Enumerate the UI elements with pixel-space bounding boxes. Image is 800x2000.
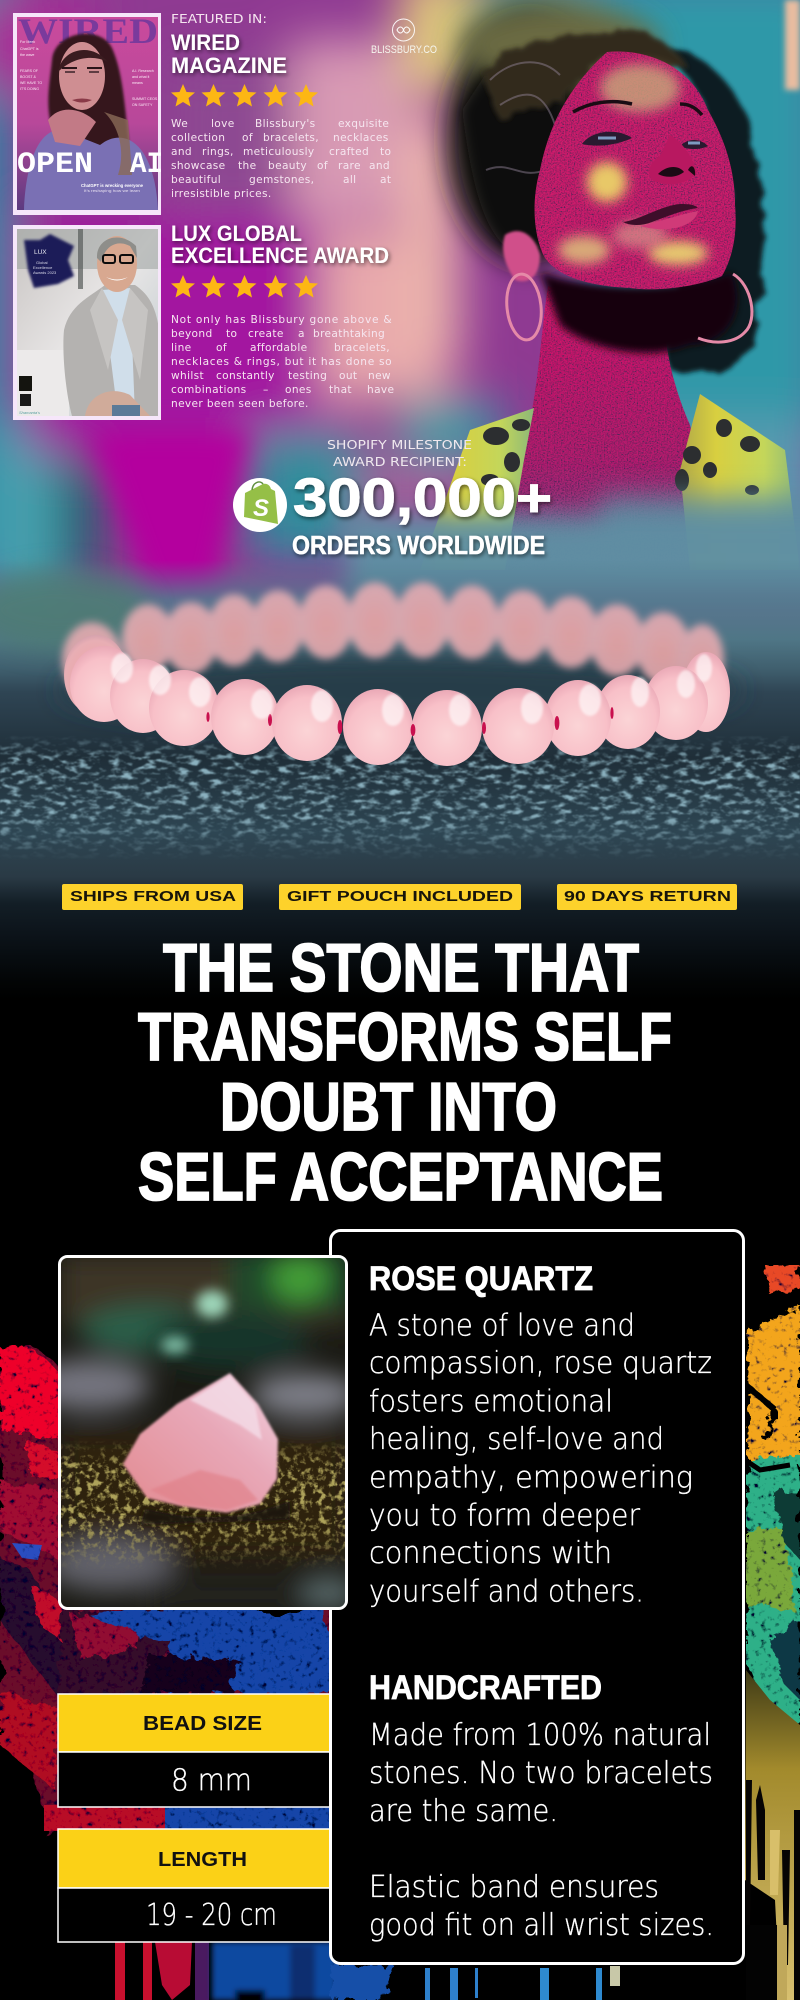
paint splash: right orange, green, yellow xyxy=(745,1265,800,2000)
text: handcrafted body: Elastic band ensures xyxy=(369,1870,659,1905)
magazine cover: Wired: ChatGPT is xyxy=(20,47,39,51)
review paragraph: meticulously xyxy=(243,146,315,158)
text: handcrafted body: stones. No two bracelets xyxy=(369,1756,713,1791)
milestone caption xyxy=(327,437,472,469)
ear xyxy=(503,231,540,281)
magazine cover: Wired: ON SAFETY xyxy=(132,103,153,107)
review paragraph: and xyxy=(369,160,390,172)
hair xyxy=(446,5,764,373)
text: featured in Wired: MAGAZINE xyxy=(171,53,287,78)
highlights xyxy=(111,653,712,726)
cord xyxy=(206,707,614,736)
face xyxy=(535,51,736,289)
text: featured in Wired: WIRED xyxy=(171,30,240,55)
badge: 90 days return xyxy=(557,884,737,910)
award paragraph: line xyxy=(171,342,192,354)
review paragraph: gemstones, xyxy=(249,174,314,186)
text: handcrafted body xyxy=(369,1718,714,1943)
award paragraph: constantly xyxy=(216,370,275,382)
award paragraph: whilst xyxy=(171,370,204,382)
lower fade over portrait xyxy=(345,495,800,605)
spec table: bead size: BEAD SIZE xyxy=(143,1712,262,1735)
portrait: woman looking up xyxy=(420,5,800,570)
award paragraph: ones xyxy=(285,384,312,396)
award paragraph: have xyxy=(367,384,394,396)
magazine cover: Lux award: Excellence xyxy=(33,265,53,270)
magazine cover: Wired xyxy=(13,11,163,215)
review paragraph xyxy=(171,118,391,200)
product photo: rose quartz bracelet xyxy=(62,582,730,766)
magenta cone xyxy=(88,430,250,600)
magazine cover: Lux award: LUX xyxy=(34,249,47,256)
review paragraph: and xyxy=(171,146,192,158)
review paragraph: to xyxy=(380,146,391,158)
brand logo: Blissbury.co: BLISSBURY.CO xyxy=(371,44,437,56)
review paragraph: crafted xyxy=(329,146,369,158)
review paragraph: collection xyxy=(171,132,225,144)
award paragraph: Not only has Blissbury gone above & xyxy=(171,314,392,326)
award paragraph: create xyxy=(248,328,284,340)
magazine cover: Wired: SUMMIT CEOS xyxy=(132,97,158,101)
spec table: length xyxy=(58,1829,333,1942)
magazine cover: Wired: and what it xyxy=(132,75,149,79)
text: handcrafted body: Made from 100% natural xyxy=(369,1718,711,1753)
text: featured in Wired xyxy=(171,11,391,200)
review paragraph: of xyxy=(242,132,253,144)
icon: Shopify bag xyxy=(233,478,287,532)
award paragraph: that xyxy=(329,384,352,396)
badge: gift pouch included xyxy=(279,884,521,910)
magazine cover: Wired: the wave xyxy=(20,53,34,57)
back row of beads xyxy=(62,582,724,698)
neck xyxy=(505,286,720,570)
hero background: blurred colour field xyxy=(0,0,800,640)
award paragraph: combinations xyxy=(171,384,247,396)
award paragraph: to xyxy=(226,328,237,340)
rating stars xyxy=(171,84,318,106)
badge: ships from USA xyxy=(62,884,243,910)
text: Lux Global award: LUX GLOBAL xyxy=(171,221,302,246)
badge: 90 days return: 90 DAYS RETURN xyxy=(564,889,731,905)
review paragraph: beautiful xyxy=(171,174,221,186)
paint splash: left red and blue xyxy=(0,1345,340,1945)
review paragraph: exquisite xyxy=(338,118,389,130)
main title: SELF ACCEPTANCE xyxy=(138,1139,663,1215)
award paragraph xyxy=(171,314,394,410)
rating stars xyxy=(171,275,318,298)
award paragraph: affordable xyxy=(250,342,308,354)
review paragraph: bracelets, xyxy=(263,132,319,144)
award paragraph: breathtaking xyxy=(313,328,385,340)
text: Lux Global award: EXCELLENCE AWARD xyxy=(171,243,389,268)
main title: DOUBT INTO xyxy=(220,1069,557,1145)
magazine cover: Wired: For Meek xyxy=(20,40,35,44)
award paragraph: new xyxy=(368,370,391,382)
heading: rose quartz: ROSE QUARTZ xyxy=(369,1260,593,1298)
masthead: WIRED xyxy=(18,11,158,51)
spec table: length: 19 - 20 cm xyxy=(146,1898,277,1933)
shirt xyxy=(420,394,800,570)
text: rose quartz body: empathy, empowering xyxy=(369,1460,693,1496)
text: handcrafted body: are the same. xyxy=(369,1794,558,1829)
panel: rose quartz description xyxy=(330,1230,744,1964)
magazine cover: Wired: IT'S DOING xyxy=(20,87,39,91)
review paragraph: beauty xyxy=(268,160,307,172)
text: handcrafted body: good fit on all wrist sizes. xyxy=(369,1908,714,1943)
magazine cover: Lux award: Shamanta's xyxy=(19,410,40,415)
earrings xyxy=(504,272,752,342)
review paragraph: all xyxy=(343,174,356,186)
text: rose quartz body: healing, self-love and xyxy=(369,1422,664,1457)
man in suit xyxy=(63,285,160,416)
main title: TRANSFORMS SELF xyxy=(138,999,672,1075)
feature badges xyxy=(62,884,737,910)
magazine cover: Wired: OPEN xyxy=(17,148,93,182)
magazine cover: Lux award: Global xyxy=(36,260,48,265)
text: rose quartz body: connections with xyxy=(369,1536,612,1571)
under-chin shadow xyxy=(540,272,738,353)
brand logo: Blissbury.co xyxy=(371,19,437,56)
review paragraph: of xyxy=(317,160,328,172)
text: rose quartz body: compassion, rose quartz xyxy=(369,1346,712,1381)
review paragraph: necklaces xyxy=(333,132,389,144)
award paragraph: never been seen before. xyxy=(171,398,309,410)
magazine cover: Wired: ChatGPT is wrecking everyone xyxy=(81,183,144,188)
paint splash: bottom drips xyxy=(115,1942,620,2000)
magazine cover: Lux award: Awards 2023 xyxy=(33,270,57,275)
mouth xyxy=(623,204,698,225)
award paragraph: testing xyxy=(288,370,327,382)
text: Lux Global award xyxy=(171,221,394,410)
review paragraph: the xyxy=(238,160,256,172)
magazine cover: Wired: means xyxy=(132,81,143,85)
main title xyxy=(138,930,672,1215)
front row of beads xyxy=(64,635,730,766)
nose xyxy=(649,135,697,184)
milestone caption: AWARD RECIPIENT: xyxy=(333,454,467,469)
heading: handcrafted: HANDCRAFTED xyxy=(369,1669,602,1707)
award paragraph: beyond xyxy=(171,328,213,340)
Shopify milestone block xyxy=(233,437,552,560)
spec table: length: LENGTH xyxy=(158,1848,247,1871)
icon: Shopify bag: S xyxy=(253,495,269,522)
review paragraph: rings, xyxy=(202,146,234,158)
review paragraph: irresistible prices. xyxy=(171,188,272,200)
award paragraph: bracelets, xyxy=(334,342,390,354)
text: rose quartz body: fosters emotional xyxy=(369,1384,613,1420)
orders count: 300,000+ xyxy=(293,468,552,528)
award paragraph: – xyxy=(263,384,269,396)
spec table: bead size xyxy=(58,1694,333,1807)
text: rose quartz body xyxy=(369,1308,712,1610)
award paragraph: necklaces & rings, but it has done so xyxy=(171,356,392,368)
magazine cover: Wired: A.I. Research xyxy=(132,69,154,73)
review paragraph: We xyxy=(171,118,188,130)
magazine cover: Lux award xyxy=(13,225,161,420)
award paragraph: out xyxy=(339,370,357,382)
eyes and brows xyxy=(573,102,702,115)
text: rose quartz body: you to form deeper xyxy=(369,1498,641,1534)
award paragraph: a xyxy=(298,328,305,340)
magazine cover: Wired: FEARS OF xyxy=(20,69,39,73)
orders caption: ORDERS WORLDWIDE xyxy=(292,530,545,560)
badge: gift pouch included: GIFT POUCH INCLUDED xyxy=(287,889,513,905)
magazine cover: Wired: It's reshaping how we learn xyxy=(84,189,140,193)
text: rose quartz body: yourself and others. xyxy=(369,1574,644,1610)
magazine cover: Wired: WE HAVE TO xyxy=(20,81,42,85)
review paragraph: love xyxy=(211,118,235,130)
blurred surface and stone background xyxy=(0,560,800,1000)
magazine cover: Wired: BOOST & xyxy=(20,75,37,79)
text: featured in Wired: FEATURED IN: xyxy=(171,11,267,26)
review paragraph: at xyxy=(380,174,391,186)
text: rose quartz body: A stone of love and xyxy=(369,1308,635,1344)
magazine cover: Wired: AI xyxy=(130,148,163,182)
review paragraph: showcase xyxy=(171,160,226,172)
review paragraph: rare xyxy=(338,160,361,172)
main title: THE STONE THAT xyxy=(163,930,639,1006)
review paragraph: Blissbury's xyxy=(255,118,316,130)
spec table: bead size: 8 mm xyxy=(171,1764,252,1798)
milestone caption: SHOPIFY MILESTONE xyxy=(327,437,472,452)
photo: raw rose quartz stone xyxy=(58,1255,348,1610)
badge: ships from USA: SHIPS FROM USA xyxy=(70,889,237,905)
award paragraph: of xyxy=(216,342,227,354)
